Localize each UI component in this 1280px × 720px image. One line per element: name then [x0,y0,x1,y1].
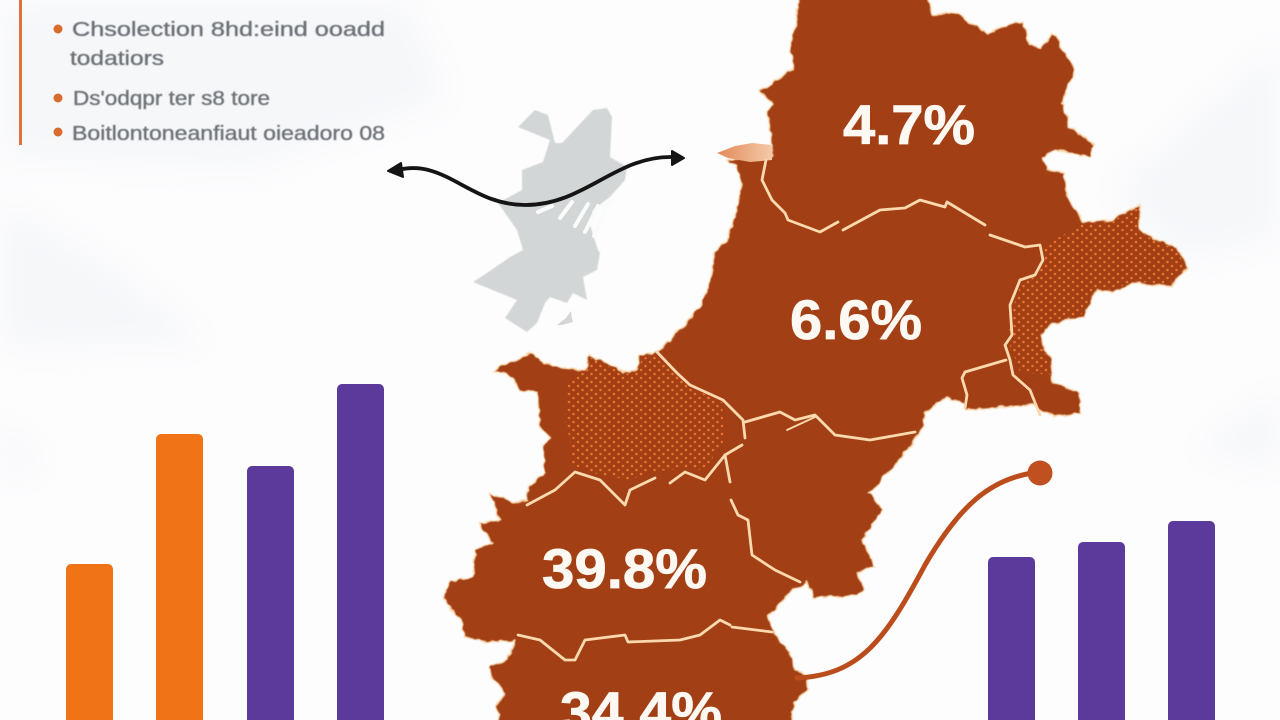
right bar chart [988,521,1215,720]
panel accent rule [19,0,22,145]
map landmass [443,0,1188,720]
left text panel [19,0,385,145]
list bullets [54,24,62,136]
choropleth map [443,0,1188,720]
list text [70,19,385,145]
left bar chart [66,384,384,720]
list text: todatiors [70,48,164,70]
list text: Chsolection 8hd:eind ooadd [72,19,385,41]
grey map islet [557,311,573,325]
list text: Boitlontoneanfiaut oieadoro 08 [72,123,385,145]
connector curve [797,460,1052,678]
value: 4.7%: 4.7% [843,93,975,156]
grey locator map [473,108,627,332]
region borders [518,160,1043,660]
value: 39.8%: 39.8% [542,537,707,600]
north-east dotted region [1008,208,1186,375]
double-headed arrow [388,151,684,205]
south-west dotted region [565,355,724,480]
list text: Ds'odqpr ter s8 tore [73,88,270,110]
tan coastal notch [717,143,772,162]
white river gaps in locator map [538,201,612,236]
value: 6.6%: 6.6% [790,288,922,351]
